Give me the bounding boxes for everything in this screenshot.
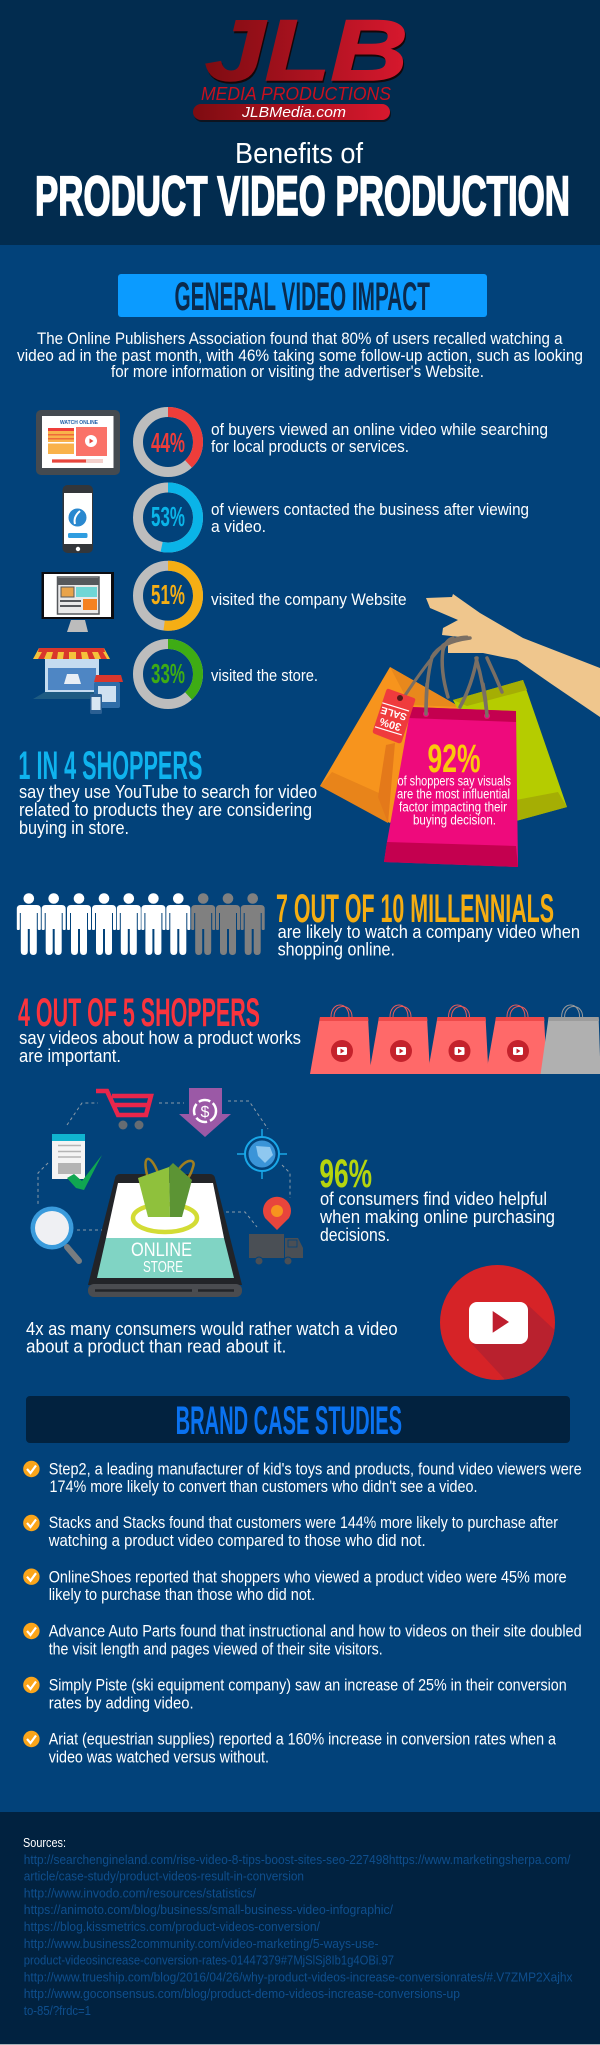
sources: http://www.invodo.com/resources/statistics/ [24,1886,256,1901]
icon: video play button [440,1265,560,1385]
sale tag [373,689,415,743]
icon: globe target [237,1129,287,1179]
stat: 96% [319,1152,555,1245]
donut: 33% [138,644,198,704]
sources: product-videosincrease-conversion-rates-01447379#7MjSlSj8Ib1g4OBi.97 [24,1953,394,1968]
text: 33%: visited the store. [211,667,318,685]
case study: OnlineShoes [23,1568,567,1604]
92% stat: factor impacting their [399,800,507,814]
case study: Simply Piste: rates by adding video. [49,1694,194,1712]
case study: Stacks and Stacks: watching a product video compared to those who did not. [48,1532,426,1550]
text: 53%: of viewers contacted the business after viewing [211,501,529,519]
stat: 4 out of 5 shoppers [18,991,301,1066]
sale tag: SALE [379,704,408,722]
sources: article/case-study/product-videos-result-in-conversion [24,1869,304,1884]
stat: 4 out of 5 shoppers: are important. [19,1046,121,1066]
hand [426,594,600,717]
logo: JLB [206,5,409,101]
donut: 33%: 33% [151,658,185,689]
text: 44%: for local products or services. [211,438,409,456]
logo [193,3,409,122]
tablet storefront: ONLINE [131,1240,192,1261]
92% stat [397,737,511,828]
text: 53% [211,501,529,536]
icon: map pin [263,1197,291,1230]
sources [23,1835,573,2018]
intro text: for more information or visiting the advertiser's Website. [111,363,484,381]
logo: JLBMedia.com [241,104,346,121]
92% stat: buying decision. [413,812,496,828]
case study: Advance Auto Parts: the visit length and pages viewed of their site visitors. [49,1640,383,1658]
case study: Stacks and Stacks [23,1514,558,1550]
stat: 96%: when making online purchasing [319,1207,555,1227]
sources: Sources: [23,1835,66,1850]
illustration: hand with shopping bags [320,594,600,867]
stat: 96%: decisions. [320,1225,390,1245]
banner: general video impact [118,274,487,319]
sources: https://blog.kissmetrics.com/product-videos-conversion/ [24,1919,320,1934]
text: 4x as many consumers: about a product than read about it. [26,1337,286,1357]
donut: 51%: 51% [151,579,185,610]
icon: price arrow [179,1088,231,1137]
donut: 53%: 53% [151,501,185,532]
stat: 7 out of 10 millennials [276,887,580,960]
pictogram: 7 of 10 people [17,893,265,955]
orange bag [320,667,460,823]
stat: 1 in 4 shoppers: related to products they are considering [19,800,312,820]
front bag handles [404,637,470,714]
sources: to-85/?frdc=1 [24,2003,91,2018]
title [35,138,570,227]
donut: 44% [138,412,198,472]
icon: document with check [52,1134,102,1190]
stat: 4 out of 5 shoppers: 4 OUT OF 5 SHOPPERS [18,991,260,1035]
title: Benefits of [235,138,364,170]
icon: tablet watch online: WATCH ONLINE [60,420,99,426]
stat: 1 in 4 shoppers [18,744,317,838]
92% stat: are the most influential [397,787,510,802]
donut: 53% [138,488,198,548]
text: 51%: visited the company Website [211,591,406,609]
stat: 1 in 4 shoppers: buying in store. [19,818,129,838]
case study: Ariat: video was watched versus without. [49,1748,269,1766]
rear bag handles [442,650,502,716]
case study: Simply Piste [23,1677,567,1712]
donut: 44%: 44% [151,427,185,458]
case study: Step2: 174% more likely to convert than customers who didn't see a video. [50,1478,478,1496]
intro text [17,330,583,381]
92% stat: 92% [428,737,480,781]
text: 44% [211,421,548,456]
stat: 4 out of 5 shoppers: say videos about how a product works [19,1028,301,1048]
green shopping bag [138,1159,194,1217]
icon: phone [62,485,93,553]
illustration: online store network [30,1088,303,1297]
text: 4x as many consumers: 4x as many consumers would rather watch a video [26,1319,398,1339]
case study: Advance Auto Parts [23,1623,582,1658]
text: 44%: of buyers viewed an online video while searching [211,421,548,439]
icon: tablet watch online [36,410,120,475]
donut: 51% [138,566,198,626]
footer band [0,1812,600,2044]
icon: price arrow: $ [201,1104,210,1121]
sale tag: 30% [378,715,403,733]
icon: magnifier [30,1206,79,1261]
sources: https://animoto.com/blog/business/small-business-video-infographic/ [24,1902,393,1917]
sources: http://www.goconsensus.com/blog/product-demo-videos-increase-conversions-up [24,1986,460,2001]
icon: cart [96,1091,151,1130]
case study: Ariat [23,1730,557,1766]
header band [0,0,600,245]
stat: 96%: of consumers find video helpful [320,1189,547,1209]
tablet storefront: STORE [143,1259,183,1276]
stat: 1 in 4 shoppers: say they use YouTube to search for video [19,782,317,802]
case study: OnlineShoes: likely to purchase than those who did not. [49,1586,315,1604]
icon: truck [249,1234,303,1265]
stat: 96%: 96% [319,1152,372,1196]
icon: online store [33,648,123,714]
stat: 1 in 4 shoppers: 1 IN 4 SHOPPERS [18,744,202,788]
pictogram: 5 video bags [310,1005,600,1074]
logo: JLB [205,3,408,99]
text: 4x as many consumers [26,1319,398,1357]
sources: http://www.business2community.com/video-marketing/5-ways-use- [24,1936,379,1951]
icon: desktop monitor [42,572,114,632]
text: 53%: a video. [211,518,266,536]
green bag [453,680,567,821]
logo: MEDIA PRODUCTIONS [201,84,391,104]
banner: brand case studies [26,1396,570,1443]
stat: 7 out of 10 millennials: shopping online. [278,940,395,960]
pink bag [384,684,518,867]
case study: Step2 [23,1460,582,1496]
stat: 7 out of 10 millennials: are likely to watch a company video when [278,922,580,942]
intro text: The Online Publishers Association found that 80% of users recalled watching a [37,330,563,348]
92% stat: of shoppers say visuals [398,774,511,789]
tablet storefront [88,1159,242,1297]
